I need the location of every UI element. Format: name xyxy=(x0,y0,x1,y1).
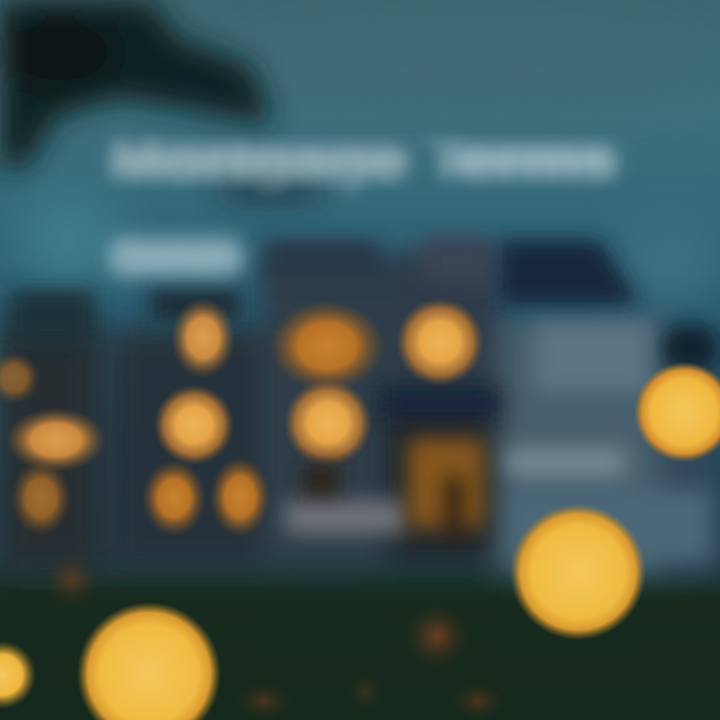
orb: right of house xyxy=(634,362,720,462)
sky tones xyxy=(20,30,720,300)
title xyxy=(112,148,616,176)
orb: lawn right xyxy=(510,504,646,640)
orb: bottom left edge xyxy=(0,641,36,709)
subtitle xyxy=(110,238,242,276)
glowing orbs xyxy=(0,362,720,720)
doorway xyxy=(303,438,484,535)
pale facade patches xyxy=(285,322,710,560)
house body xyxy=(0,250,720,575)
title text: Mortgage Terms xyxy=(108,128,618,193)
dim lawn lights xyxy=(44,552,504,720)
lit windows xyxy=(0,298,484,537)
orb: lawn bottom left xyxy=(77,602,221,720)
subtitle text: Guide xyxy=(108,233,244,282)
dark tree silhouette xyxy=(0,0,325,202)
dark roof sections xyxy=(10,238,720,418)
